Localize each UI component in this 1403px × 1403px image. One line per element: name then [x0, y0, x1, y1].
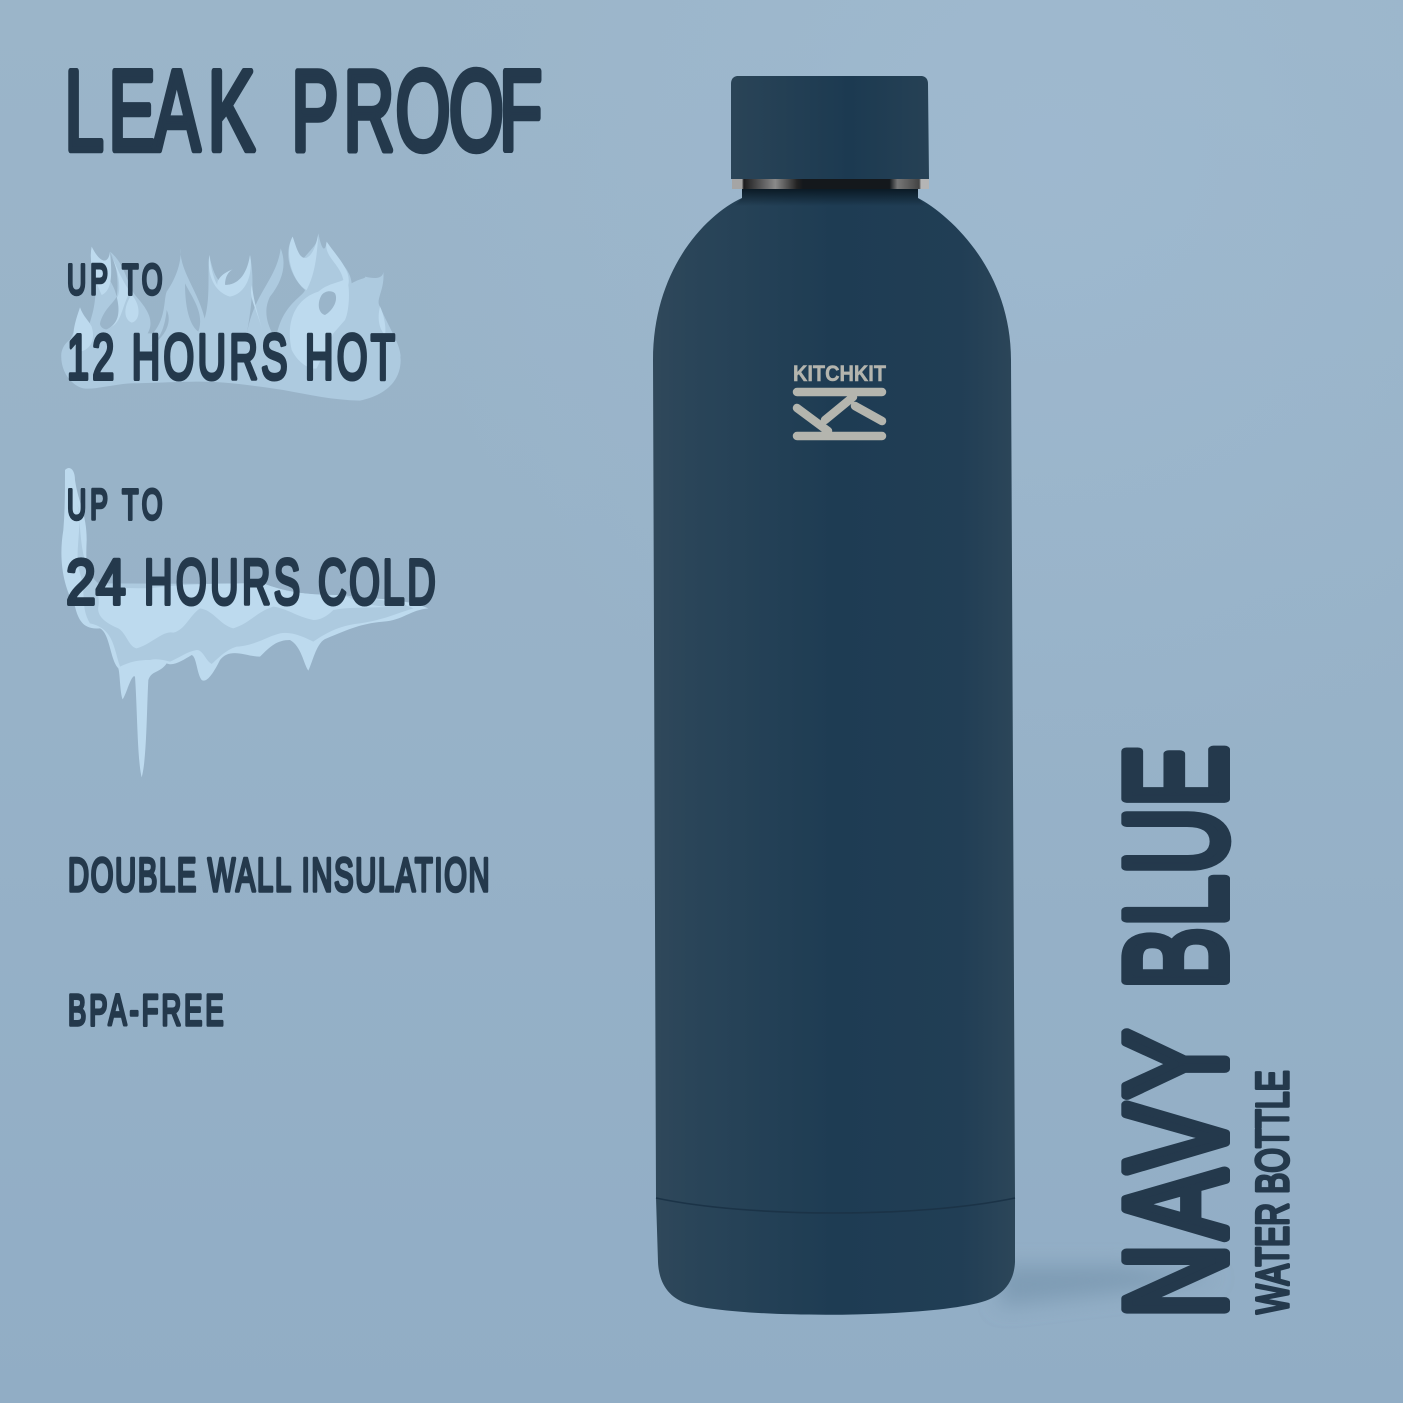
logo mark	[797, 392, 882, 436]
vertical subtitle: water bottle: WATER BOTTLE	[1249, 1070, 1298, 1314]
text: up to (cold): UP TO	[67, 481, 162, 529]
flame back layer	[61, 233, 401, 401]
flame front layer	[73, 233, 385, 369]
text: 12 hours hot: 12 HOURS HOT	[67, 323, 395, 393]
flame graphic	[61, 233, 401, 401]
metal ring	[732, 179, 929, 189]
base seam	[656, 1198, 1015, 1213]
text: up to (hot): UP TO	[67, 256, 162, 304]
text: 24 hours cold: HOURS	[144, 548, 300, 618]
text: 24 hours cold: 24	[66, 546, 126, 618]
logo	[793, 361, 887, 436]
neck shadow	[734, 188, 926, 206]
text: bpa-free: BPA-FREE	[68, 985, 224, 1035]
ice outer layer	[61, 468, 428, 777]
heading: leak proof: LEAK PROOF	[64, 48, 542, 175]
vertical title: navy blue	[1097, 745, 1255, 1318]
text: 24 hours cold: COLD	[318, 548, 436, 618]
bottle	[653, 76, 1015, 1315]
ice top layer	[98, 583, 390, 648]
bottle shadow	[1000, 1266, 1220, 1306]
logo wordmark: KITCHKIT	[793, 361, 887, 386]
cap	[731, 76, 929, 179]
vertical title: navy blue: NAVY	[1097, 1030, 1255, 1318]
text: 24 hours cold	[66, 546, 436, 618]
ice graphic	[61, 468, 428, 777]
vertical title: navy blue: BLUE	[1098, 745, 1255, 989]
ice middle layer	[77, 503, 413, 667]
bottle body	[653, 188, 1015, 1315]
flame pockets	[100, 283, 336, 348]
text: double wall insulation: DOUBLE WALL INSULATION	[68, 850, 490, 902]
